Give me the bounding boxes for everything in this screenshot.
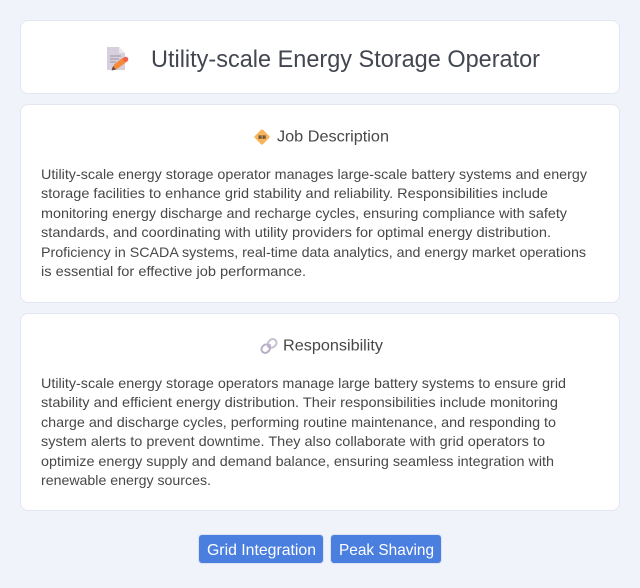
text block: responsibility: optimize energy supply and demand balance, ensuring seamless integration with — [41, 453, 554, 469]
text block: responsibility — [41, 375, 566, 488]
text block: responsibility: system alerts to prevent downtime. They also collaborate with grid operators to — [41, 433, 545, 449]
tag: peak shaving: Peak Shaving — [339, 542, 434, 559]
text block: job description: Proficiency in SCADA systems, real-time data analytics, and energy market operations — [41, 244, 586, 260]
text block: responsibility: stability and efficient energy distribution. Their responsibilities include monitoring — [41, 394, 558, 410]
text block: job description — [41, 166, 587, 279]
heading: job description: Job Description — [277, 128, 389, 146]
icon: diamond road sign — [254, 129, 270, 145]
panel: responsibility — [20, 313, 620, 511]
panel: header — [20, 20, 620, 94]
tag: grid integration: Grid Integration — [207, 542, 316, 559]
text block: job description: Utility-scale energy storage operator manages large-scale battery systems and energy — [41, 166, 587, 182]
tag: grid integration — [198, 534, 324, 564]
icon: document with pencil — [107, 47, 128, 70]
text block: responsibility: renewable energy sources. — [41, 472, 211, 488]
text block: responsibility: Utility-scale energy storage operators manage large battery systems to ensure grid — [41, 375, 566, 391]
text block: job description: monitoring energy discharge and recharge cycles, ensuring compliance with safety — [41, 205, 567, 221]
text block: responsibility: charge and discharge cycles, performing routine maintenance, and responding to — [41, 414, 556, 430]
title: Utility-scale Energy Storage Operator — [151, 46, 540, 73]
heading: responsibility: Responsibility — [283, 338, 383, 354]
text block: job description: is essential for effective job performance. — [41, 263, 306, 279]
icon: chain link — [260, 338, 278, 354]
tag: peak shaving — [330, 534, 442, 564]
panel: job description — [20, 104, 620, 303]
text block: job description: standards, and coordinating with utility providers for optimal energy distribution. — [41, 224, 551, 240]
text block: job description: storage facilities to enhance grid stability and reliability. Responsibilities include — [41, 185, 548, 201]
